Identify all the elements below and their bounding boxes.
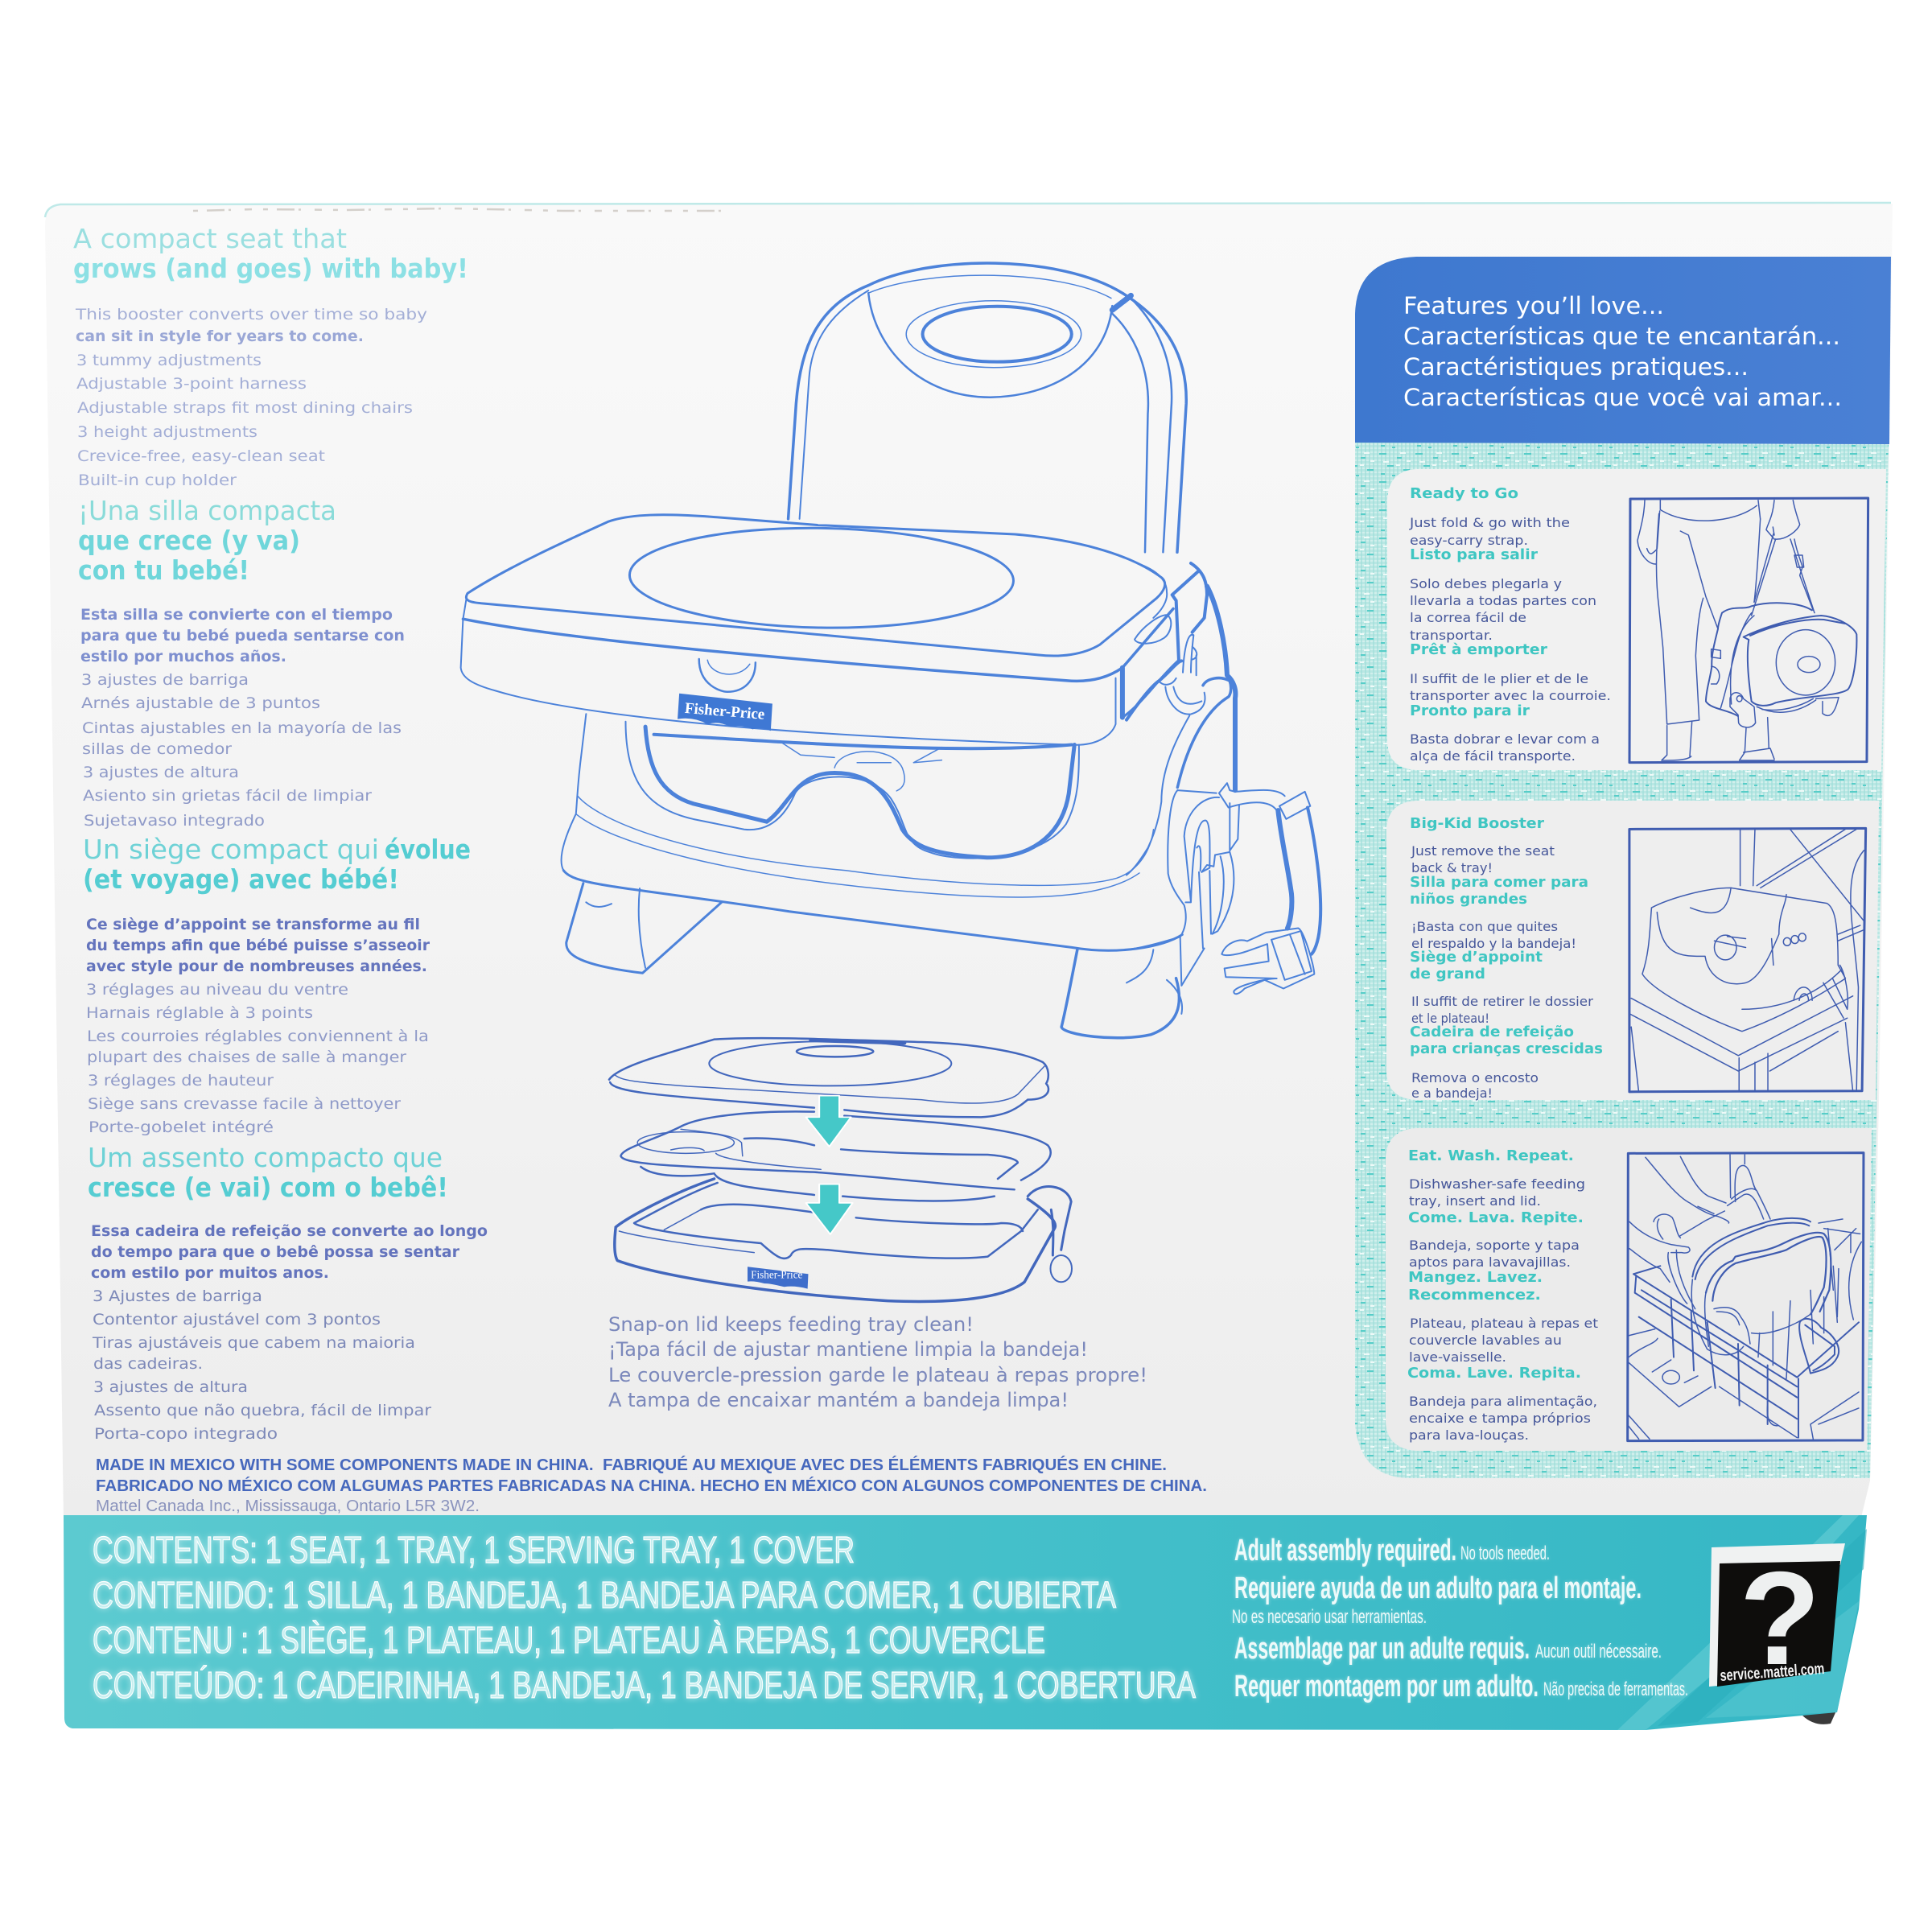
panel: features heading: Caractéristiques pratiques... [1403,353,1749,381]
text: eat wash repeat: couvercle lavables au [1409,1333,1562,1348]
text block: Portuguese intro: com estilo por muitos anos. [91,1264,329,1282]
text: big-kid booster: Just remove the seat [1411,843,1555,859]
text: eat wash repeat: aptos para lavavajillas. [1409,1254,1571,1270]
text block: contents list: CONTENIDO: 1 SILLA, 1 BANDEJA, 1 BANDEJA PARA COMER, 1 CUBIERTA [93,1574,1116,1616]
text block: assembly notice: No tools needed. [1460,1543,1550,1564]
arrow: tray down [806,1184,853,1234]
illustration: carrying folded seat [1629,498,1868,763]
text block: assembly notice: No es necesario usar herramientas. [1232,1606,1427,1628]
text: ready to go: llevarla a todas partes con [1410,593,1596,608]
text block: French intro: évolue [385,834,471,865]
text block: French intro: Ce siège d’appoint se transforme au fil [86,916,420,933]
text block: Portuguese intro: Contentor ajustável com 3 pontos [93,1311,381,1329]
text block: Spanish intro: Cintas ajustables en la mayoría de las [82,719,402,737]
text: big-kid booster: Remova o encosto [1411,1070,1539,1085]
text: eat wash repeat: Mangez. Lavez. [1408,1269,1543,1286]
text block: French intro: Les courroies réglables conviennent à la [87,1028,429,1045]
text block: Portuguese intro: 3 ajustes de altura [93,1378,248,1396]
text block: manufacturing notice: Mattel Canada Inc., Mississauga, Ontario L5R 3W2. [96,1497,480,1515]
text block: Portuguese intro: cresce (e vai) com o bebê! [88,1172,448,1203]
text: eat wash repeat: Plateau, plateau à repas et [1410,1316,1598,1331]
lid [609,1038,1048,1117]
text block: Spanish intro [78,495,405,830]
caption: snap-on lid: A tampa de encaixar mantém a bandeja limpa! [608,1389,1069,1411]
logo: Fisher-Price [678,694,772,731]
text block: Spanish intro: Esta silla se convierte con el tiempo [80,606,393,624]
panel: features heading [1355,257,1891,444]
text: ready to go: Pronto para ir [1410,702,1530,719]
text: ready to go: transportar. [1410,628,1493,643]
text block: English intro [73,223,468,489]
text: big-kid booster: Il suffit de retirer le dossier [1411,994,1593,1009]
logo: Fisher-Price: Fisher-Price [684,700,765,723]
text block: English intro: Built-in cup holder [78,472,237,489]
text: big-kid booster [1410,815,1603,1101]
text block: Spanish intro: Asiento sin grietas fácil de limpiar [83,787,372,805]
text block: assembly notice: Requer montagem por um adulto. [1234,1670,1539,1703]
text block: French intro: 3 réglages de hauteur [88,1072,274,1090]
text: big-kid booster: back & tray! [1411,860,1493,875]
text: big-kid booster: Big-Kid Booster [1410,815,1544,832]
panel: ready to go [1387,469,1886,770]
icon: question mark service badge: ? [1740,1544,1820,1692]
text: eat wash repeat: Bandeja para alimentação, [1409,1394,1597,1409]
text: eat wash repeat: para lava-louças. [1409,1427,1529,1443]
text block: Portuguese intro: das cadeiras. [93,1355,203,1373]
seat back [789,263,1186,552]
text block: Portuguese intro: 3 Ajustes de barriga [93,1287,262,1305]
text block: Spanish intro: ¡Una silla compacta [78,495,336,526]
text block: Spanish intro: Sujetavaso integrado [84,812,265,830]
text block: manufacturing notice: FABRICADO NO MÉXICO COM ALGUMAS PARTES FABRICADAS NA CHINA. HECHO EN MÉXICO CON ALGUNOS COMPONENTES DE CHINA. [96,1477,1207,1495]
text block: contents list: CONTEÚDO: 1 CADEIRINHA, 1 BANDEJA, 1 BANDEJA DE SERVIR, 1 COBERTURA [93,1664,1196,1706]
text block: Spanish intro: para que tu bebé pueda sentarse con [80,627,405,645]
text: ready to go: alça de fácil transporte. [1410,748,1576,764]
box back panel [45,203,1893,1521]
text block: Spanish intro: 3 ajustes de altura [83,764,239,781]
text: big-kid booster: para crianças crescidas [1410,1040,1603,1057]
text block: French intro: Un siège compact qui [83,834,379,865]
text: big-kid booster: ¡Basta con que quites [1411,919,1558,934]
text: ready to go: Basta dobrar e levar com a [1410,731,1600,747]
text block: manufacturing notice: MADE IN MEXICO WITH SOME COMPONENTS MADE IN CHINA. FABRIQUÉ AU MEXIQUE AVEC DES ÉLÉMENTS FABRIQUÉS EN CHINE. [96,1456,1167,1474]
panel: features heading: Features you’ll love... [1403,292,1664,319]
text block: English intro: grows (and goes) with baby! [73,253,468,284]
text block: English intro: This booster converts over time so baby [75,306,427,323]
text: eat wash repeat: Recommencez. [1408,1287,1541,1304]
caption: snap-on lid [608,1313,1147,1411]
text: big-kid booster: Siège d’appoint [1410,949,1543,966]
text: eat wash repeat: Coma. Lave. Repita. [1407,1365,1581,1382]
text block: assembly notice: Requiere ayuda de un adulto para el montaje. [1234,1572,1642,1605]
text: big-kid booster: el respaldo y la bandeja! [1411,936,1576,951]
text block: Portuguese intro [88,1142,488,1443]
text: big-kid booster: e a bandeja! [1411,1085,1493,1101]
icon: question mark service badge: service.mattel.com [1720,1660,1825,1685]
text: eat wash repeat: Dishwasher-safe feeding [1409,1176,1585,1192]
text block: contents list: CONTENU : 1 SIÈGE, 1 PLATEAU, 1 PLATEAU À REPAS, 1 COUVERCLE [93,1619,1045,1661]
logo: Fisher-Price small [748,1267,808,1289]
text: ready to go: Listo para salir [1410,546,1538,563]
text: eat wash repeat: Eat. Wash. Repeat. [1408,1147,1574,1164]
text: eat wash repeat: Bandeja, soporte y tapa [1409,1238,1580,1253]
text block: Spanish intro: Arnés ajustable de 3 puntos [81,694,320,712]
text block: French intro: avec style pour de nombreuses années. [86,958,427,975]
illustration: dishwasher rack [1628,1153,1864,1441]
text: eat wash repeat [1407,1147,1598,1443]
text: eat wash repeat: tray, insert and lid. [1409,1193,1541,1209]
text block: Portuguese intro: Um assento compacto que [88,1142,443,1173]
panel: big-kid booster [1386,801,1879,1101]
text block: English intro: 3 tummy adjustments [76,352,262,369]
text: eat wash repeat: encaixe e tampa próprios [1409,1411,1591,1426]
text: big-kid booster: niños grandes [1410,891,1527,908]
text: big-kid booster: et le plateau! [1411,1011,1489,1026]
illustration: booster seat with tray [461,263,1320,1038]
caption: snap-on lid: Snap-on lid keeps feeding tray clean! [608,1313,974,1336]
text block: manufacturing notice [96,1456,1207,1515]
text block: Spanish intro: que crece (y va) [78,525,300,556]
text: ready to go: Ready to Go [1410,485,1518,502]
feeding tray insert [620,1111,1051,1201]
text: eat wash repeat: Come. Lava. Repite. [1408,1209,1584,1226]
text block: assembly notice: Assemblage par un adulte requis. [1234,1632,1530,1666]
text block: contents list [93,1529,1196,1706]
illustration: stacked tray assembly [609,1038,1072,1301]
text block: English intro: can sit in style for years to come. [76,327,364,345]
text block: French intro: du temps afin que bébé puisse s’asseoir [86,937,430,954]
text: ready to go: transporter avec la courroie. [1410,688,1611,703]
text: ready to go: easy-carry strap. [1410,533,1528,548]
caption: snap-on lid: ¡Tapa fácil de ajustar mantiene limpia la bandeja! [608,1338,1088,1361]
text block: Portuguese intro: Assento que não quebra, fácil de limpar [94,1402,431,1419]
text block: assembly notice: Não precisa de ferramentas. [1543,1679,1688,1700]
tray base [615,1179,1072,1301]
text block: Spanish intro: 3 ajustes de barriga [81,671,249,689]
panel: features background [1355,443,1889,1478]
seat side with strap and buckle [1127,563,1320,1014]
text: big-kid booster: Silla para comer para [1410,874,1588,891]
text block: English intro: Crevice-free, easy-clean seat [77,447,325,465]
text block: French intro: 3 réglages au niveau du ventre [86,981,348,999]
seat feet [566,884,1179,1038]
text: big-kid booster: Cadeira de refeição [1410,1024,1574,1040]
arrow: lid down [806,1096,851,1147]
text block: Portuguese intro: Tiras ajustáveis que cabem na maioria [92,1334,415,1352]
panel: bottom teal band [64,1515,1867,1730]
panel: features heading: Características que você vai amar... [1403,384,1842,411]
text block: contents list: CONTENTS: 1 SEAT, 1 TRAY, 1 SERVING TRAY, 1 COVER [93,1529,855,1571]
text block: assembly notice: Adult assembly required. [1234,1534,1456,1567]
illustration: booster on chair [1629,828,1866,1092]
caption: snap-on lid: Le couvercle-pression garde le plateau à repas propre! [608,1364,1147,1386]
text block: Spanish intro: con tu bebé! [78,554,249,586]
text block: Portuguese intro: Porta-copo integrado [94,1425,278,1443]
text block: Spanish intro: estilo por muchos años. [80,648,286,665]
text: ready to go: Il suffit de le plier et de le [1410,671,1588,686]
text block: English intro: 3 height adjustments [77,423,257,441]
text block: Portuguese intro: do tempo para que o bebê possa se sentar [91,1243,460,1261]
feeding tray [461,515,1179,745]
text block: English intro: A compact seat that [73,223,347,254]
text block: Spanish intro: sillas de comedor [82,740,232,758]
text block: French intro: (et voyage) avec bébé! [83,863,399,895]
text: ready to go [1409,485,1611,764]
seat base [562,714,1182,950]
text: big-kid booster: de grand [1410,966,1485,982]
text: ready to go: la correa fácil de [1410,610,1526,625]
panel: features heading: Características que te encantarán... [1403,323,1840,350]
text block: English intro: Adjustable straps fit most dining chairs [77,399,413,417]
text block: French intro: Siège sans crevasse facile à nettoyer [88,1095,401,1113]
text: ready to go: Just fold & go with the [1409,515,1570,530]
icon: question mark service badge [1709,1543,1845,1692]
text block: Portuguese intro: Essa cadeira de refeição se converte ao longo [91,1222,488,1240]
text block: assembly notice: Aucun outil nécessaire. [1535,1641,1662,1662]
text block: English intro: Adjustable 3-point harness [76,375,307,393]
text: ready to go: Solo debes plegarla y [1410,576,1562,591]
text: ready to go: Prêt à emporter [1410,641,1547,658]
text block: French intro: Harnais réglable à 3 points [86,1004,313,1022]
text block: French intro: Porte-gobelet intégré [89,1118,274,1136]
text block: French intro: plupart des chaises de salle à manger [87,1048,406,1066]
panel: eat wash repeat [1386,1128,1872,1451]
text block: assembly notice [1232,1534,1688,1703]
logo: Fisher-Price small: Fisher-Price [751,1270,803,1281]
text: eat wash repeat: lave-vaisselle. [1409,1349,1506,1365]
text block: French intro [83,834,471,1136]
